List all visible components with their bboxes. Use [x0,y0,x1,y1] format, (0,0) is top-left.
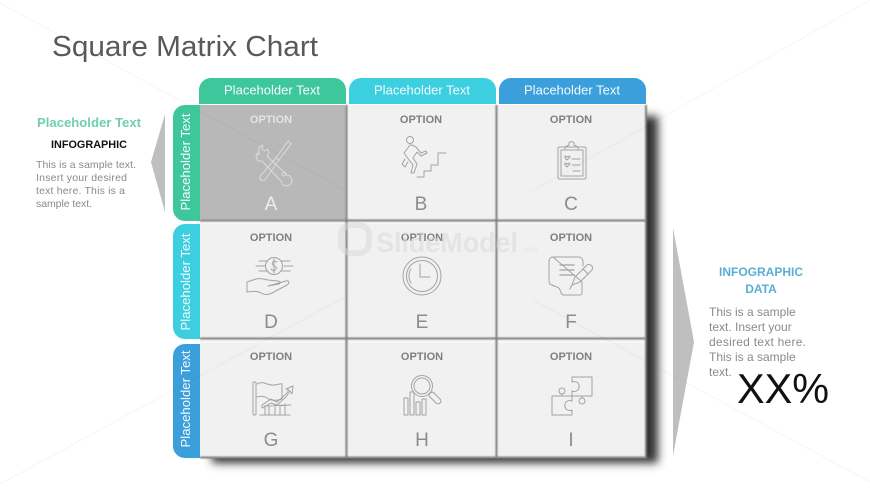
row labels: Placeholder Text [179,350,193,448]
watermark: SlideModel [376,227,518,258]
percentage value: XX% [737,365,829,412]
cell A letter: A [265,194,278,215]
cell H: H [415,430,429,451]
header labels: Placeholder Text [374,84,471,98]
title: Square Matrix Chart [52,31,318,63]
cell C [498,105,646,220]
cell F: F [565,312,577,333]
cell E [349,224,496,338]
header: teal [349,78,496,104]
icon: puzzle pieces [552,377,592,415]
cell H [349,343,496,456]
cell B: OPTION [400,114,442,126]
icon: clock [403,257,441,295]
cell edge lines [200,105,647,458]
cell A [200,105,346,220]
header labels [224,84,621,98]
right body text: text. Insert your [709,320,792,334]
left heading: Placeholder Text [37,116,142,130]
row tab: teal [173,224,200,339]
cell G: G [264,430,278,451]
cell C: OPTION [550,114,592,126]
left body text: sample text. [36,198,92,210]
left text block [36,116,142,210]
row tabs [173,105,200,458]
icon: hand with coin [247,258,293,294]
cell D [200,224,346,338]
watermark: .com [520,245,538,254]
left body text: This is a sample text. [36,159,136,171]
row labels: Placeholder Text [179,113,193,210]
cell I: I [568,430,574,451]
header: green [199,78,346,104]
cell H: OPTION [401,351,443,363]
icon: flag and growth chart [253,382,293,415]
cell G: OPTION [250,351,292,363]
icon: clipboard checklist [558,142,586,179]
cell B: B [415,194,427,215]
row tab: green [173,105,200,221]
right body text: desired text here. [709,335,806,349]
cell D: D [264,312,278,333]
row labels: Placeholder Text [179,233,193,330]
icon: bars and magnifier [404,376,441,415]
right body text: This is a sample [709,305,796,319]
icon: tools [256,141,292,186]
right heading: INFOGRAPHIC [719,265,803,279]
header labels: Placeholder Text [524,84,621,98]
icon: person on stairs [402,136,446,177]
matrix drop shadow [212,116,658,463]
cell G [200,343,346,456]
right body text: This is a sample [709,350,796,364]
icon: document with pen [549,257,593,295]
cell I: OPTION [550,351,592,363]
left body text: Insert your desired [36,172,127,184]
header: blue [499,78,646,104]
right heading: DATA [745,282,777,296]
matrix base [200,105,646,458]
cell C: C [564,194,578,215]
cell F: OPTION [550,232,592,244]
header labels: Placeholder Text [224,84,321,98]
left body text: text here. This is a [36,185,125,197]
row tab: blue [173,344,200,458]
left arrow [151,114,165,212]
column headers [199,78,646,104]
cell A label: OPTION [250,114,292,126]
cell F [498,224,646,338]
cell E: OPTION [401,232,443,244]
right body text: text. [709,365,732,379]
row labels [179,113,193,448]
right text block [709,265,829,412]
right arrow [673,228,694,456]
cell I [498,343,646,456]
cell E: E [416,312,428,333]
left subheading: INFOGRAPHIC [51,139,127,151]
cell B [349,105,496,220]
cell D: OPTION [250,232,292,244]
